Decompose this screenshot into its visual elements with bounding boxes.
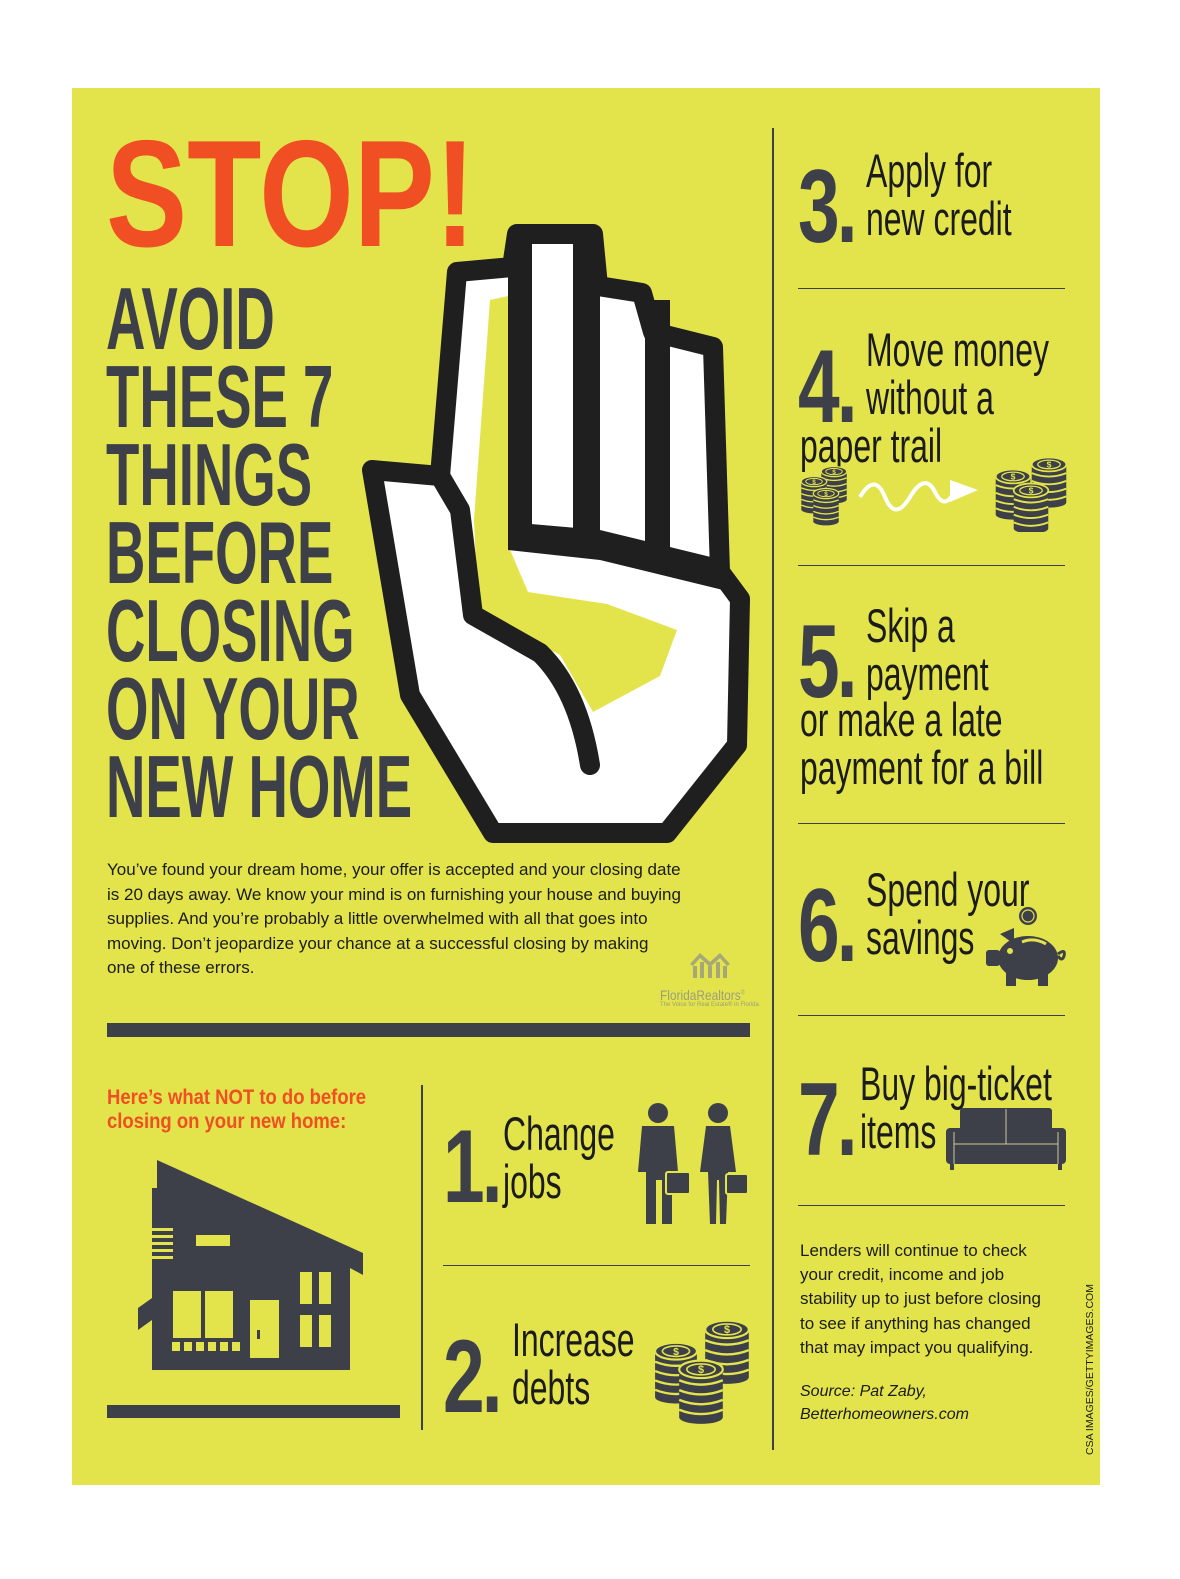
item 7: buy big-ticket items: [798, 1057, 1066, 1178]
intro paragraph: moving. Don’t jeopardize your chance at a successful closing by making: [107, 934, 648, 952]
source: [800, 1383, 969, 1423]
item 4: move money: Move money: [866, 323, 1049, 376]
item 2: increase debts: [443, 1313, 749, 1435]
item 5: skip a payment: [798, 599, 1043, 794]
title: STOP!: STOP!: [106, 109, 475, 279]
heading: avoid these 7 things: THINGS: [106, 425, 312, 524]
bottom bar: [107, 1405, 400, 1418]
item 1: change jobs: 1.: [443, 1109, 500, 1225]
icon: piggy bank: [986, 907, 1066, 986]
item 6: spend your savings: savings: [866, 911, 974, 964]
vertical dividers: [772, 128, 774, 1450]
item 3: apply for new credit: new credit: [866, 192, 1012, 245]
heading: avoid these 7 things: BEFORE: [106, 503, 333, 602]
intro paragraph: You’ve found your dream home, your offer is accepted and your closing date: [107, 860, 681, 879]
icon: business people: [638, 1103, 747, 1224]
icon: sofa: [946, 1108, 1066, 1170]
subheading: what NOT to do: Here’s what NOT to do before: [107, 1086, 366, 1109]
logo: Florida Realtors: The Voice for Real Estate® in Florida: [660, 1002, 759, 1008]
heading: avoid these 7 things: NEW HOME: [106, 737, 412, 836]
item 7: buy big-ticket items: items: [860, 1105, 936, 1158]
item 7: buy big-ticket items: Buy big-ticket: [860, 1057, 1052, 1110]
icon: coin stacks: [655, 1322, 749, 1424]
item 3: apply for new credit: Apply for: [866, 144, 992, 197]
heading: avoid these 7 things: AVOID: [106, 269, 275, 368]
heading: avoid these 7 things: CLOSING: [106, 581, 355, 680]
item 6: spend your savings: [798, 863, 1066, 986]
item 4: move money: [798, 323, 1066, 532]
item 5: skip a payment: payment for a bill: [800, 741, 1043, 794]
yellow panel: [72, 88, 1100, 1485]
source: Source: Pat Zaby,: [800, 1383, 927, 1400]
item 2: increase debts: debts: [512, 1361, 590, 1414]
note: lenders: Lenders will continue to check your credit, income and job stability up to just before closing to see if anything has changed that may impact you qualifying.: [800, 1241, 1041, 1357]
item 3: apply for new credit: [798, 144, 1012, 265]
item 1: change jobs: Change: [503, 1107, 615, 1160]
item 1: change jobs: [443, 1103, 747, 1225]
item 4: move money: paper trail: [800, 419, 942, 472]
intro paragraph: is 20 days away. We know your mind is on furnishing your house and buying: [107, 884, 681, 904]
logo: Florida Realtors: [660, 953, 759, 1008]
source: Betterhomeowners.com: [800, 1406, 969, 1423]
item 5: skip a payment: or make a late: [800, 693, 1003, 746]
item 5: skip a payment: payment: [866, 647, 989, 700]
item 5: skip a payment: 5.: [798, 604, 855, 720]
item 3: apply for new credit: 3.: [798, 149, 855, 265]
divider bar: [107, 1023, 750, 1037]
item 6: spend your savings: 6.: [798, 868, 855, 984]
item 6: spend your savings: Spend your: [866, 863, 1029, 916]
subheading: what NOT to do: closing on your new home:: [107, 1110, 346, 1133]
intro paragraph: supplies. And you’re probably a little overwhelmed with all that goes into: [107, 909, 648, 928]
icon: house: [138, 1160, 363, 1370]
heading: avoid these 7 things: THESE 7: [106, 347, 333, 446]
item 5: skip a payment: Skip a: [866, 599, 955, 652]
intro paragraph: one of these errors.: [107, 958, 254, 977]
item 2: increase debts: Increase: [512, 1313, 635, 1366]
subheading: what NOT to do: [107, 1086, 366, 1133]
credit: vertical text: CSA IMAGES/GETTYIMAGES.COM: [1084, 1284, 1096, 1455]
icon: money transfer: [801, 458, 1066, 532]
item 4: move money: without a: [866, 371, 994, 424]
item 2: increase debts: 2.: [443, 1319, 500, 1435]
intro paragraph: [107, 860, 681, 977]
icon: stop hand: [362, 224, 750, 843]
item 7: buy big-ticket items: 7.: [798, 1062, 855, 1178]
heading: avoid these 7 things: ON YOUR: [106, 659, 360, 758]
item 1: change jobs: jobs: [503, 1155, 562, 1208]
heading: avoid these 7 things: [106, 269, 412, 836]
logo: Florida Realtors: FloridaRealtors®: [660, 987, 744, 1003]
item 4: move money: 4.: [798, 329, 855, 445]
